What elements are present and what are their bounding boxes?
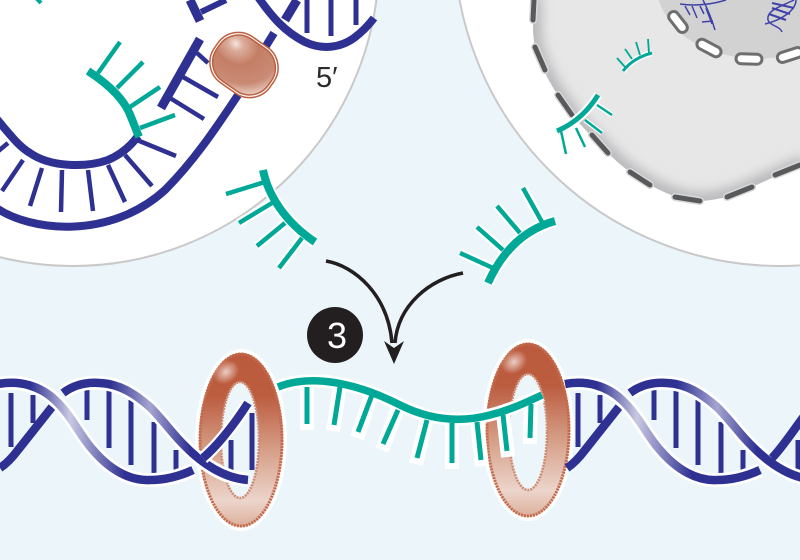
strand at right edge xyxy=(772,415,800,458)
inner looped strand with rungs xyxy=(0,117,176,212)
cell body xyxy=(525,0,800,210)
helix right xyxy=(565,383,800,480)
nuclear envelope pores xyxy=(667,9,800,64)
primer crossing membrane xyxy=(557,95,612,154)
label: 5 prime: 5′ xyxy=(316,62,338,94)
primer annealed to template xyxy=(278,381,542,469)
arrow: converging arrows xyxy=(326,261,463,364)
top primer fragment xyxy=(36,0,41,3)
upper template fragment xyxy=(161,0,274,119)
polymerase oval xyxy=(200,23,288,107)
cell membrane dashes xyxy=(533,0,800,201)
clamp ring right xyxy=(482,339,574,521)
clamp ring left xyxy=(195,349,287,531)
free primer left xyxy=(226,170,315,268)
nucleus DNA xyxy=(680,0,796,32)
helix left xyxy=(0,383,252,480)
panel: left circle inset xyxy=(0,0,379,266)
panel: right circle inset with cell xyxy=(454,0,800,266)
upper double-strand curve xyxy=(258,0,374,47)
nucleus xyxy=(658,0,800,59)
primer bound to template xyxy=(88,42,175,137)
strand through left ring xyxy=(203,403,248,458)
lower template strand xyxy=(0,95,238,227)
step badge 3 xyxy=(307,307,363,363)
small primer in cytoplasm xyxy=(617,39,652,71)
step badge 3: 3 xyxy=(327,315,347,356)
free primer right xyxy=(460,188,555,283)
